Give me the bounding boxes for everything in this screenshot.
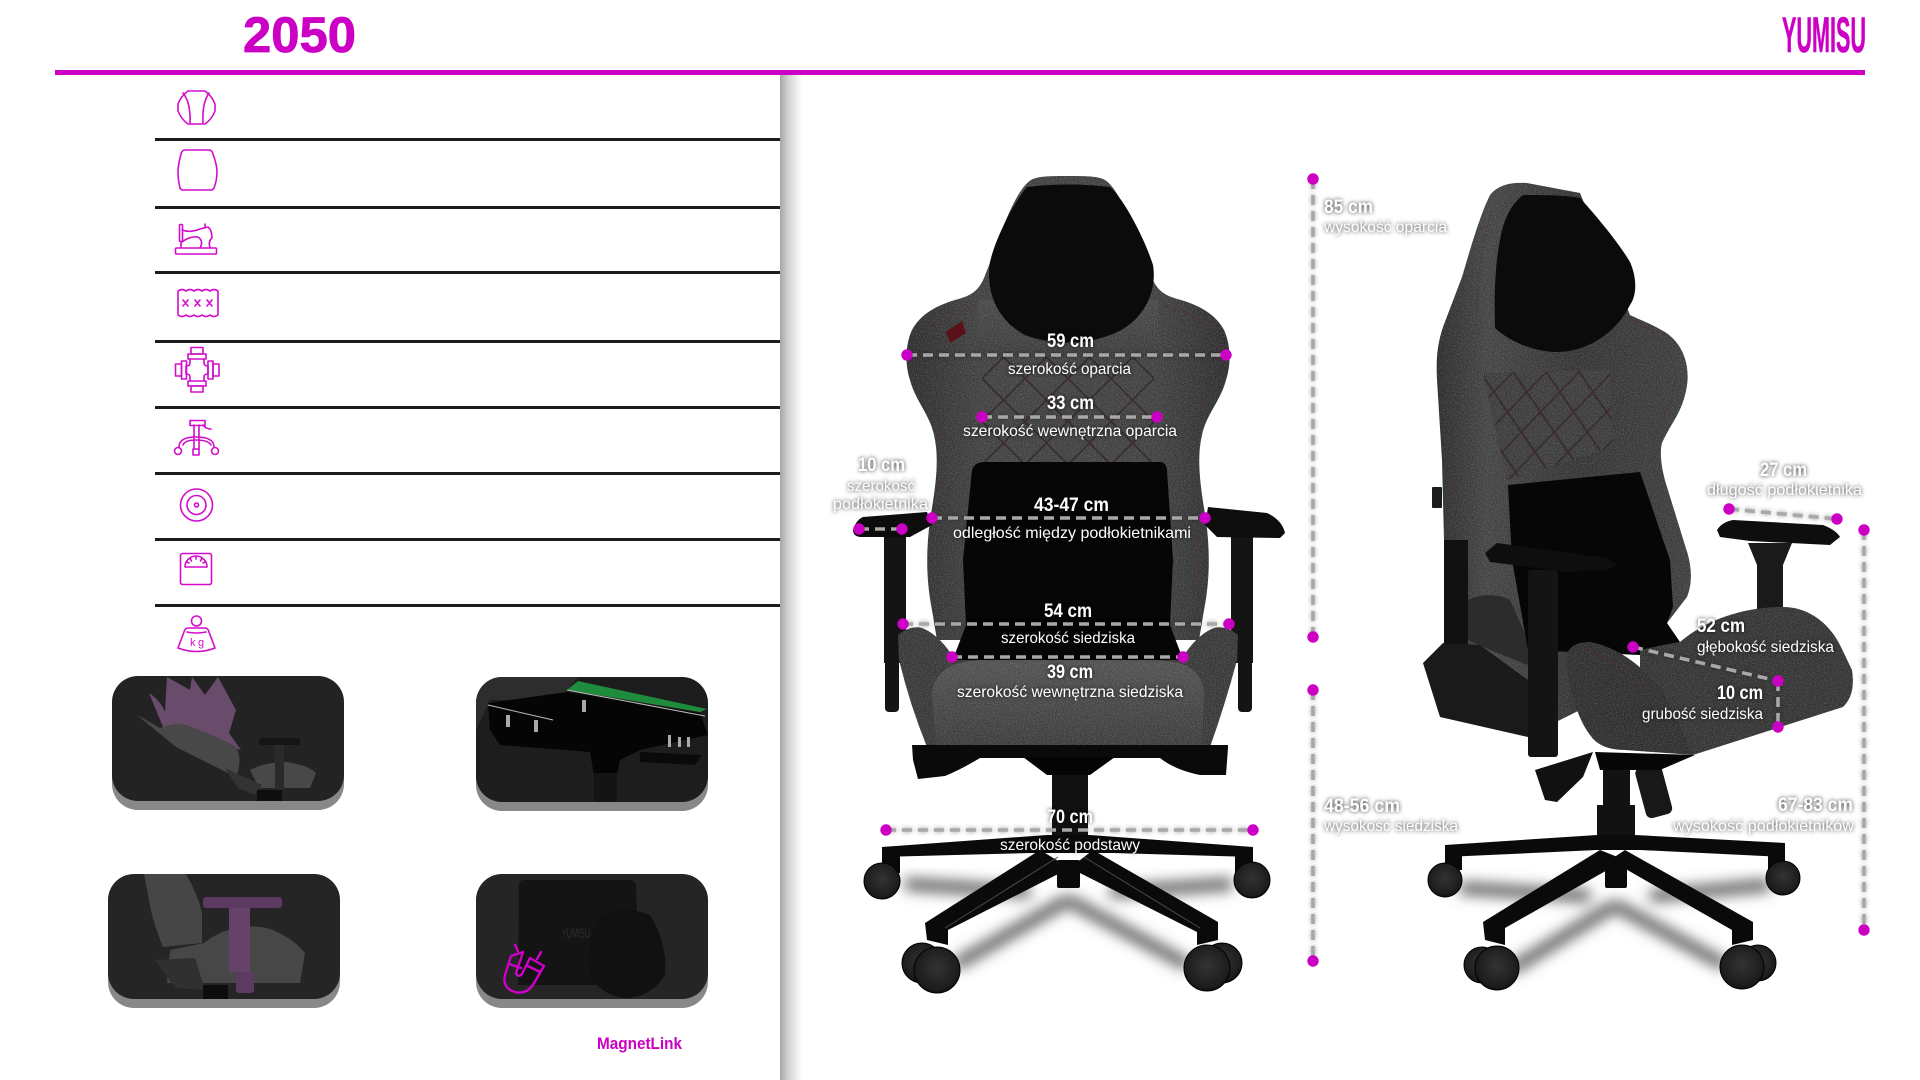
dimension labels: długość podłokietnika bbox=[1707, 482, 1862, 499]
tilt knob bbox=[1634, 762, 1674, 819]
icon: magnet bbox=[504, 945, 544, 993]
panel shadow divider bbox=[780, 75, 802, 1080]
icon: scale bbox=[180, 554, 212, 584]
icon: kg weight bbox=[178, 616, 215, 652]
under-seat plate and paddles bbox=[912, 745, 1228, 779]
star base bbox=[1445, 835, 1785, 945]
star base bbox=[882, 835, 1253, 945]
feature card: tilt mechanism bbox=[476, 677, 708, 811]
dimension labels: szerokość podstawy bbox=[1000, 837, 1140, 854]
feature card: reclining backrest bbox=[112, 676, 344, 810]
dimension labels: głębokość siedziska bbox=[1697, 639, 1834, 656]
height lever and paddle bbox=[1535, 752, 1593, 802]
dimensions: side view bbox=[1627, 460, 1870, 936]
icon: caster wheel bbox=[180, 489, 212, 521]
title: model number 2050: 2050 bbox=[243, 7, 356, 63]
seat cushion bbox=[932, 660, 1204, 746]
dimension labels: wysokość oparcia bbox=[1323, 219, 1447, 236]
casters bbox=[1428, 861, 1800, 990]
center panel bbox=[978, 300, 1158, 357]
dimension labels: szerokość siedziska bbox=[1001, 630, 1135, 647]
icon: seat cushion bbox=[178, 150, 217, 190]
lower backrest side wing bbox=[1423, 643, 1528, 737]
feature card: 4D armrest bbox=[108, 874, 340, 1008]
backrest fabric bbox=[906, 176, 1230, 640]
header rule bbox=[55, 70, 1865, 75]
dimension dots bbox=[1627, 503, 1870, 936]
chair: side view bbox=[1423, 183, 1853, 990]
dimension dots bbox=[853, 173, 1319, 967]
seat bbox=[898, 627, 1238, 747]
dimension labels: 27 cm bbox=[1760, 460, 1807, 481]
quilted panel bbox=[1483, 370, 1613, 480]
dimension labels: wysokość podłokietników bbox=[1672, 818, 1854, 835]
dimension labels: podłokietnika bbox=[833, 496, 928, 513]
headrest bbox=[989, 184, 1154, 342]
dimension labels: 10 cm bbox=[858, 455, 905, 476]
dimension labels: 54 cm bbox=[1044, 601, 1092, 622]
dimension labels: grubość siedziska bbox=[1642, 706, 1763, 723]
lumbar cushion bbox=[952, 462, 1184, 662]
side tag bbox=[1432, 487, 1442, 508]
dimension labels: 67-83 cm bbox=[1778, 795, 1853, 816]
dimension labels: 59 cm bbox=[1047, 331, 1094, 352]
chair: front view bbox=[853, 176, 1285, 993]
dimension lines bbox=[859, 179, 1313, 961]
near armrest post bbox=[1528, 570, 1558, 757]
dimension labels: wysokość siedziska bbox=[1323, 818, 1458, 835]
casters bbox=[864, 862, 1270, 993]
icon: sewing machine bbox=[176, 224, 216, 254]
dimension labels: szerokość wewnętrzna oparcia bbox=[963, 423, 1177, 440]
dimension labels: 33 cm bbox=[1047, 393, 1094, 414]
far armrest post bbox=[1748, 543, 1792, 610]
icon: mechanism frame bbox=[176, 348, 219, 392]
icon: foam layers bbox=[178, 290, 218, 316]
rear strip bbox=[1444, 540, 1468, 650]
quilted panel bbox=[982, 357, 1154, 462]
right armrest pad bbox=[1205, 507, 1285, 538]
icon: chair base bbox=[174, 420, 218, 455]
rear side fabric bbox=[1468, 595, 1528, 665]
dimension labels bbox=[833, 197, 1458, 854]
armrest posts bbox=[884, 537, 1253, 712]
dimension labels: 52 cm bbox=[1697, 616, 1745, 637]
dimension labels: szerokość wewnętrzna siedziska bbox=[957, 684, 1183, 701]
dimension labels: odległość między podłokietnikami bbox=[953, 525, 1191, 542]
floor shadow bbox=[1460, 885, 1770, 970]
logo patch bbox=[946, 321, 966, 343]
feature card: MagnetLink cushions bbox=[476, 874, 708, 1008]
under-seat mechanism bbox=[1595, 752, 1695, 770]
gas cylinder bbox=[1597, 770, 1635, 843]
gas cylinder bbox=[1052, 775, 1088, 835]
dimensions: front view bbox=[833, 173, 1458, 967]
dimension lines bbox=[1633, 509, 1864, 930]
lumbar cushion bbox=[1508, 472, 1680, 655]
dimension labels: 70 cm bbox=[1047, 807, 1093, 828]
near armrest pad bbox=[1485, 543, 1618, 572]
dimension labels: 43-47 cm bbox=[1034, 495, 1109, 516]
icon: backrest bbox=[178, 91, 215, 124]
stitching bbox=[1449, 210, 1675, 500]
dimension labels: 10 cm bbox=[1717, 683, 1763, 704]
spec list: icons and row rules bbox=[155, 91, 780, 652]
backrest fabric bbox=[1437, 183, 1691, 735]
dimension labels: szerokość oparcia bbox=[1008, 361, 1131, 378]
dimension labels bbox=[1642, 460, 1862, 835]
far armrest pad bbox=[1717, 520, 1840, 545]
icon: kg weight: kg bbox=[190, 637, 207, 649]
far seat bbox=[1640, 607, 1853, 755]
stitching bbox=[918, 305, 1218, 625]
tilt mechanism bbox=[1023, 757, 1115, 775]
floor shadow bbox=[905, 884, 1232, 965]
feature card: MagnetLink cushions: YUMISU bbox=[562, 925, 590, 941]
caption: MagnetLink: MagnetLink bbox=[597, 1034, 682, 1053]
dimension labels: 85 cm bbox=[1324, 197, 1373, 218]
headrest bbox=[1495, 195, 1635, 352]
dimension labels: szerokość bbox=[847, 478, 915, 495]
dimension labels: 48-56 cm bbox=[1324, 796, 1400, 817]
near seat bolster bbox=[1567, 642, 1693, 755]
left armrest pad bbox=[853, 512, 932, 537]
dimension labels: 39 cm bbox=[1047, 662, 1093, 683]
